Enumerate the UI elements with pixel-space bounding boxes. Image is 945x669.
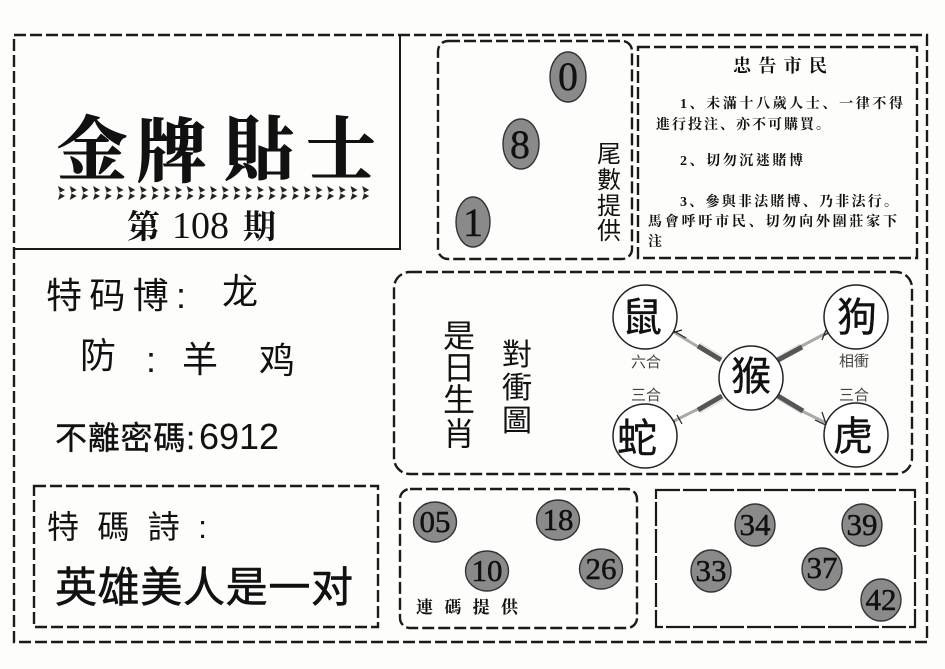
text: guard zodiacs — [80, 335, 295, 381]
vertical label — [597, 141, 621, 245]
ball 42: 42 — [866, 582, 896, 617]
arrows — [660, 323, 840, 431]
panel: numbers — [656, 490, 915, 627]
text: guard zodiacs: : — [146, 339, 156, 380]
ball 37: 37 — [806, 550, 838, 585]
node: monkey: 猴 — [731, 355, 771, 399]
issue number: 第 — [127, 209, 160, 246]
relation labels: 三合 — [839, 387, 869, 404]
notice body: 2、切勿沉迷賭博 — [680, 152, 803, 169]
vertical label: birth sign: 生 — [443, 382, 475, 418]
ball 18: 18 — [542, 502, 574, 537]
notice body: 1、未滿十八歲人士、一律不得 — [680, 95, 903, 112]
panel: zodiac diagram — [394, 272, 912, 474]
ball 39: 39 — [846, 507, 878, 542]
panel: tail numbers — [438, 41, 632, 259]
text: secret code: 6912 — [199, 416, 279, 457]
relation labels: 六合 — [631, 354, 661, 371]
panel: notice — [638, 47, 917, 258]
node: tiger: 虎 — [833, 415, 873, 459]
node: rat — [613, 285, 677, 349]
title: 士 — [306, 113, 376, 190]
ball 8 — [503, 119, 539, 169]
title: 金 — [57, 113, 127, 190]
panel: poem — [34, 486, 378, 627]
vertical label: 數 — [597, 167, 621, 194]
ball 42 — [861, 579, 901, 621]
vertical label: birth sign: 日 — [443, 350, 475, 386]
notice body: 注。 — [648, 233, 670, 250]
vertical label: clash chart — [502, 339, 532, 438]
panel: title — [15, 36, 400, 249]
text: guard zodiacs: 鸡 — [259, 340, 295, 381]
notice heading: 忠告市民 — [733, 56, 827, 76]
text: guard zodiacs: 防 — [80, 335, 116, 376]
ball 39 — [842, 504, 882, 546]
text: special code zodiac: 特码博: — [46, 275, 186, 316]
notice body — [648, 95, 903, 250]
relation labels: 三合 — [631, 387, 661, 404]
ball 1: 1 — [463, 200, 483, 245]
text: special code zodiac: 龙 — [222, 271, 258, 312]
vertical label: clash chart: 衝 — [502, 372, 532, 405]
panel: linked numbers — [400, 489, 637, 628]
poem text: 英雄美人是一对 — [55, 564, 353, 611]
title — [57, 113, 376, 192]
issue number — [127, 205, 276, 247]
issue number: 期 — [243, 209, 276, 246]
ball 33: 33 — [696, 553, 726, 588]
issue number: 108 — [172, 205, 229, 247]
node: rat: 鼠 — [622, 296, 662, 340]
ball 37 — [802, 548, 842, 590]
ball 34 — [735, 504, 775, 546]
ball 33 — [691, 550, 731, 592]
vertical label: clash chart: 對 — [502, 339, 532, 372]
node: tiger — [824, 403, 888, 467]
ball 0: 0 — [558, 54, 578, 99]
ball 0 — [550, 52, 586, 102]
ball 34: 34 — [740, 507, 771, 542]
ball 18 — [536, 500, 580, 540]
ball 26 — [580, 549, 622, 589]
decorative arrow row — [57, 185, 373, 200]
ball 1 — [456, 197, 490, 247]
text: secret code — [55, 416, 279, 457]
text: special code zodiac — [46, 271, 258, 316]
poem heading: 特碼詩: — [47, 509, 207, 545]
notice body: 馬會呼吁市民、切勿向外圍莊家下 — [648, 213, 898, 230]
vertical label: birth sign: 是 — [443, 318, 475, 354]
node: snake: 蛇 — [617, 417, 657, 461]
caption: 連碼提供 — [416, 597, 519, 617]
notice body: 3、參與非法賭博、乃非法行。 — [680, 193, 898, 210]
vertical label: birth sign: 肖 — [443, 416, 475, 452]
vertical label: clash chart: 圖 — [502, 405, 532, 438]
ball 10 — [466, 551, 508, 591]
relation labels: 相衝 — [839, 353, 869, 370]
vertical label: 供 — [597, 218, 621, 245]
ball 26: 26 — [586, 551, 616, 586]
title: 牌 — [137, 115, 207, 192]
text: guard zodiacs: 羊 — [182, 339, 218, 380]
vertical label: birth sign — [443, 318, 475, 452]
text: secret code: 不離密碼: — [55, 420, 195, 456]
ball 05: 05 — [420, 504, 450, 539]
node: monkey — [719, 346, 783, 410]
ball 05 — [414, 502, 456, 542]
vertical label: 尾 — [597, 141, 621, 168]
node: dog — [824, 285, 888, 349]
notice body: 進行投注、亦不可購買。 — [656, 116, 830, 133]
ball 10: 10 — [472, 553, 502, 588]
relation labels — [631, 353, 869, 404]
node: dog: 狗 — [837, 296, 877, 340]
vertical label: 提 — [597, 193, 621, 220]
title: 貼 — [224, 113, 294, 190]
node: snake — [613, 404, 677, 468]
ball 8: 8 — [510, 122, 530, 167]
